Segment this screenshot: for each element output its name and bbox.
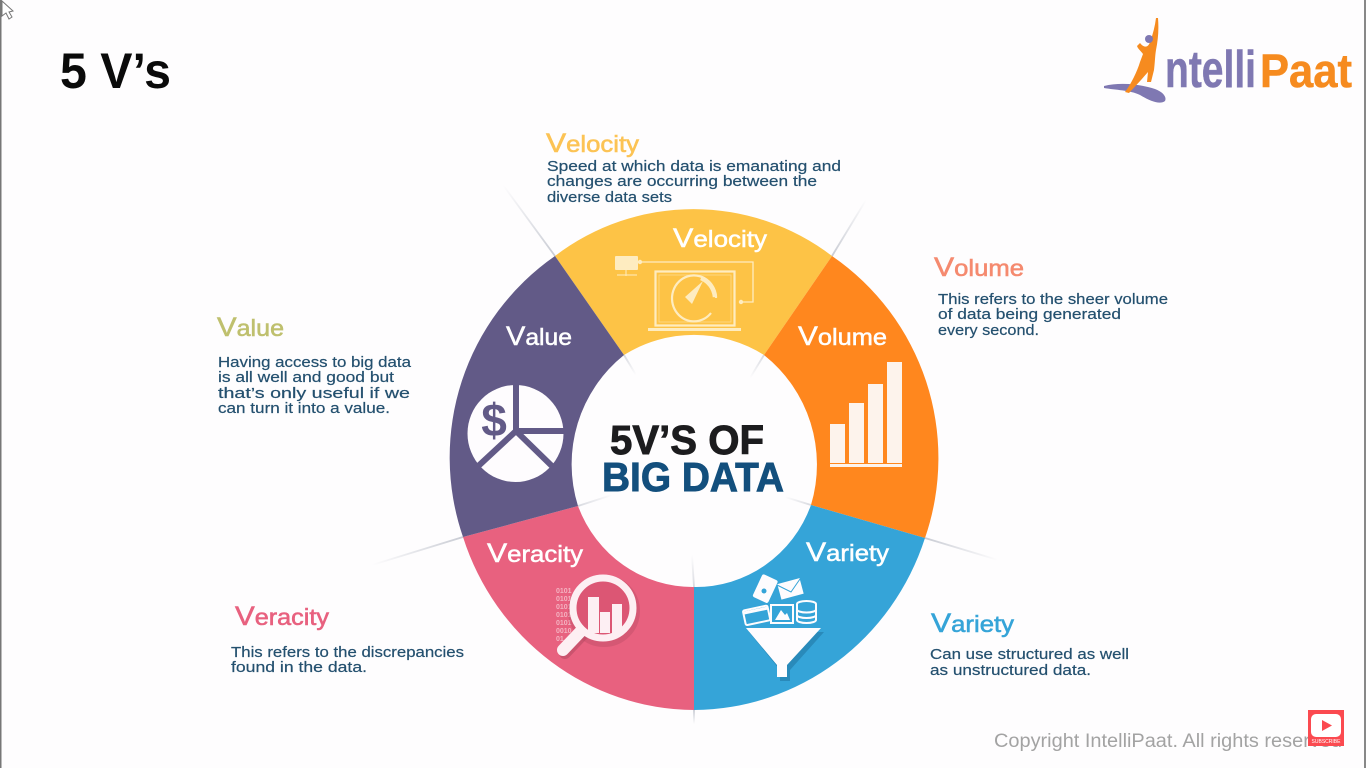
icon: magnifier over data	[556, 578, 636, 653]
callout: Velocity	[546, 128, 841, 206]
callout: Veracity: Veracity	[235, 601, 330, 631]
callout: Variety: as unstructured data.	[930, 662, 1091, 679]
center heading: 5V’S OF	[610, 417, 764, 463]
segment: volume	[764, 256, 938, 538]
icon: subscribe badge: SUBSCRIBE	[1312, 739, 1341, 745]
icon: dollar pie chart	[468, 380, 568, 482]
callout: Veracity: found in the data.	[231, 659, 367, 676]
callout: Variety: Variety	[931, 608, 1015, 638]
callout: Velocity: Speed at which data is emanating and	[547, 158, 841, 175]
icon: bar chart	[830, 362, 902, 467]
icon: subscribe badge	[1308, 710, 1344, 746]
center heading: BIG DATA	[602, 454, 784, 500]
logo: IntelliPaat: Paat	[1260, 44, 1352, 97]
icon: magnifier over data: 0101	[556, 620, 572, 627]
callout: Volume: This refers to the sheer volume	[938, 291, 1168, 308]
wheel label: Velocity: Velocity	[673, 223, 768, 253]
icon: magnifier over data: 0101	[556, 588, 572, 595]
segment: velocity	[555, 209, 832, 355]
donut chart: 5 V's wheel	[450, 209, 938, 710]
callout: Veracity: This refers to the discrepancies	[231, 644, 464, 661]
callout: Value: can turn it into a value.	[218, 400, 390, 417]
copyright notice: Copyright IntelliPaat. All rights reserved	[994, 731, 1342, 752]
segment: value	[450, 256, 624, 537]
center heading	[602, 417, 784, 500]
callout: Volume: Volume	[934, 252, 1024, 282]
callout: Velocity: changes are occurring between the	[547, 173, 817, 190]
callout: Veracity	[231, 601, 464, 676]
title: 5 V’s	[60, 43, 171, 99]
icon: magnifier over data: 01010	[556, 604, 576, 611]
callout: Velocity: Velocity	[546, 128, 640, 158]
wheel label: Variety: Variety	[806, 537, 890, 567]
icon: magnifier over data: 01	[556, 636, 564, 643]
callout: Value	[217, 312, 412, 417]
callout: Velocity: diverse data sets	[547, 189, 672, 206]
wheel label: Veracity: Veracity	[487, 538, 584, 568]
callout leader lines	[372, 185, 998, 724]
logo: IntelliPaat	[1104, 18, 1352, 103]
segment: veracity	[463, 506, 694, 710]
callout: Volume: of data being generated	[938, 306, 1121, 323]
segment: variety	[694, 505, 925, 710]
callout: Volume: every second.	[938, 322, 1039, 339]
icon: magnifier over data: 0010	[556, 628, 572, 635]
callout: Value: Having access to big data	[218, 354, 412, 371]
icon: dollar pie chart: $	[481, 394, 507, 446]
callout: Value: is all well and good but	[218, 369, 395, 386]
icon: magnifier over data: 01010	[556, 596, 576, 603]
wheel label: Value: Value	[506, 321, 572, 351]
logo: IntelliPaat: ntelli	[1165, 41, 1256, 99]
callout: Value: Value	[217, 312, 284, 342]
callout: Volume	[934, 252, 1168, 339]
icon: laptop speedometer	[615, 256, 753, 331]
icon: magnifier over data: 01010	[556, 612, 576, 619]
callout: Variety: Can use structured as well	[930, 646, 1129, 663]
callout: Value: that’s only useful if we	[218, 385, 410, 402]
callout: Variety	[930, 608, 1129, 679]
icon: mouse cursor	[2, 1, 13, 19]
wheel label: Volume: Volume	[798, 321, 887, 351]
icon: data funnel	[743, 574, 824, 681]
